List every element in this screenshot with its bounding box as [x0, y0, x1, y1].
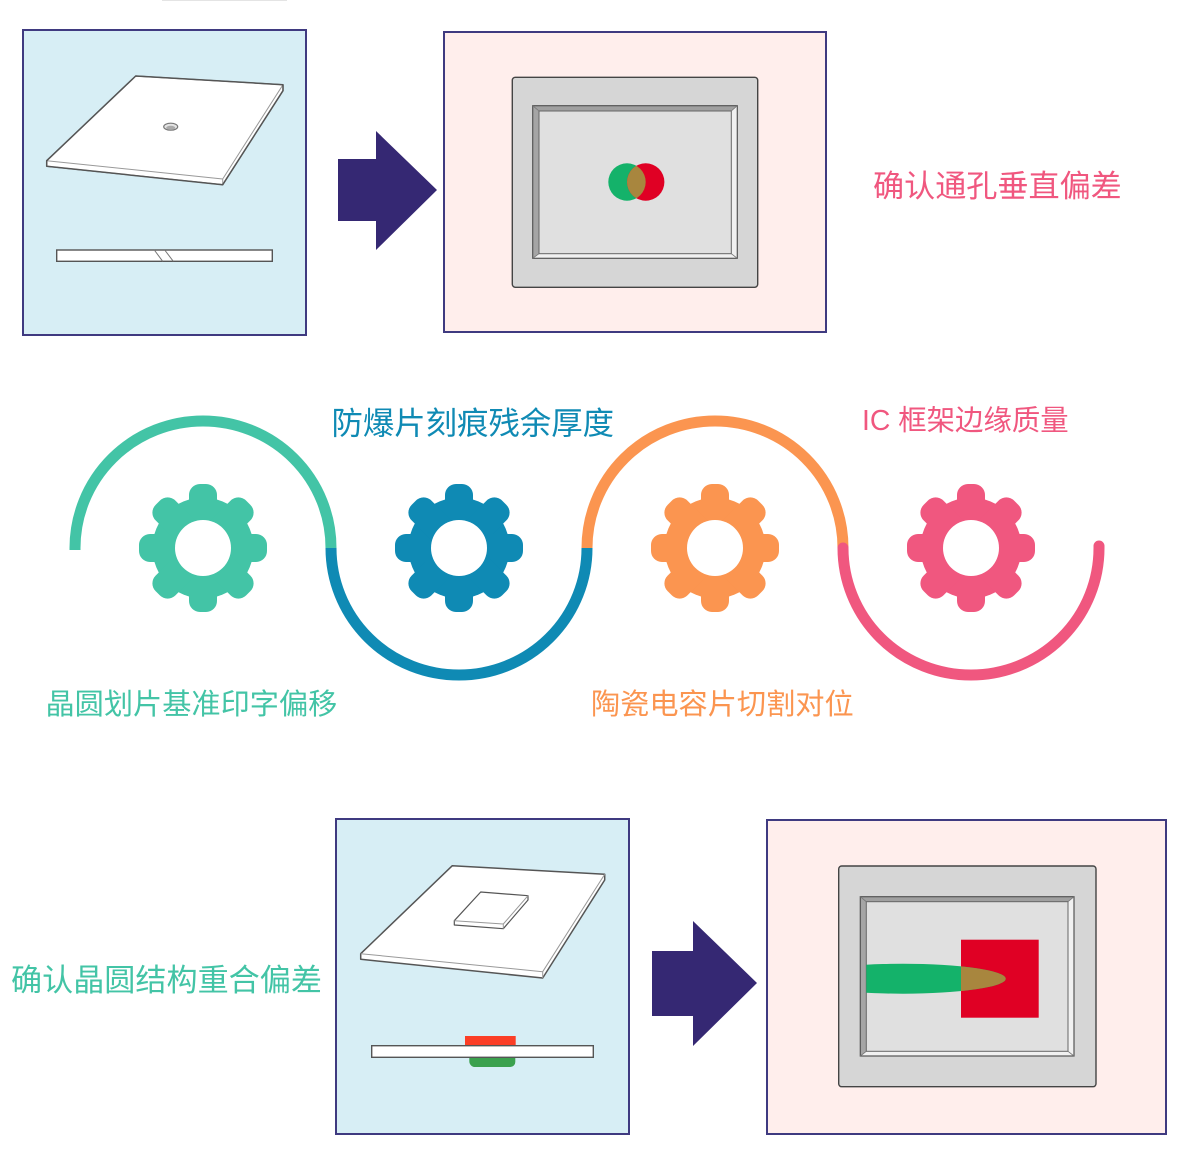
panel: through-hole inspection result — [444, 32, 826, 332]
icon: gear pink — [907, 484, 1035, 612]
label: ceramic capacitor alignment: 陶瓷电容片切割对位 — [591, 688, 854, 721]
icon: gear blue — [395, 484, 523, 612]
label: scribe mark offset: 晶圆划片基准印字偏移 — [46, 688, 337, 721]
icon: plate with through hole — [47, 76, 283, 185]
icon: plate with chip — [361, 866, 605, 978]
icon: gear orange — [651, 484, 779, 612]
label: IC frame edge quality: IC 框架边缘质量 — [862, 405, 1069, 437]
arc: pink — [843, 546, 1099, 675]
panel: through-hole sample — [23, 30, 306, 335]
arc: blue — [331, 548, 587, 675]
panel: wafer overlay inspection result — [767, 820, 1166, 1134]
arc: teal — [75, 421, 331, 550]
label: wafer overlay deviation: 确认晶圆结构重合偏差 — [11, 963, 322, 998]
icon: inspection screen with overlay — [838, 865, 1097, 1088]
label: rupture disc score thickness: 防爆片刻痕残余厚度 — [332, 406, 614, 441]
icon: gear teal — [139, 484, 267, 612]
label: through-hole deviation: 确认通孔垂直偏差 — [873, 169, 1122, 204]
icon: through-hole cross-section — [57, 250, 272, 261]
arrow: bottom — [652, 921, 757, 1046]
process wave — [75, 421, 1099, 675]
icon: inspection screen with circles — [512, 77, 758, 287]
arrow: top — [338, 131, 437, 250]
panel: wafer structure sample — [336, 819, 629, 1134]
arc: orange — [587, 421, 843, 548]
icon: wafer cross-section — [372, 1036, 593, 1067]
